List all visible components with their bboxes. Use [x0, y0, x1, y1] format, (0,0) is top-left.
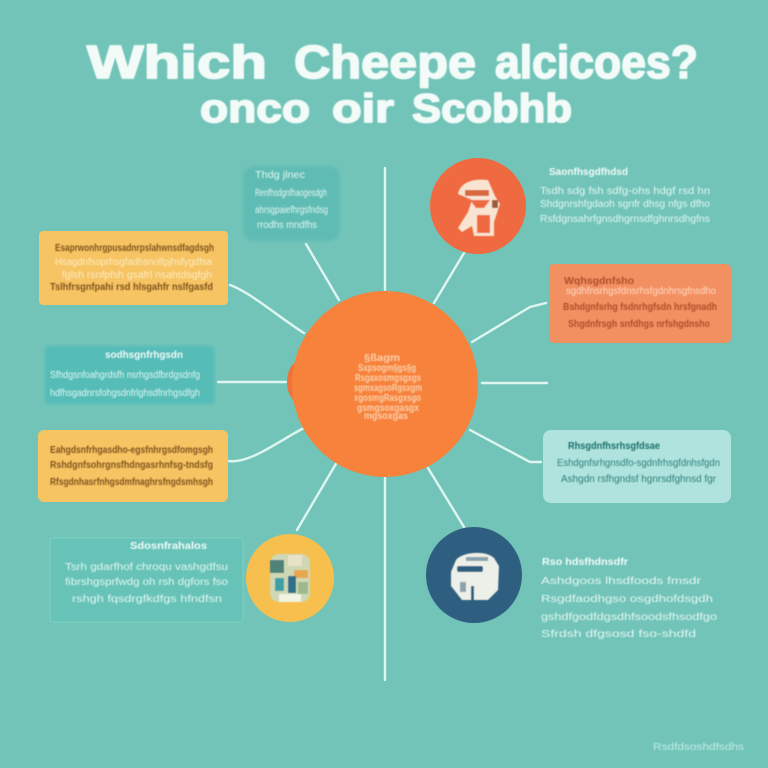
- panel: orange box: Shgdnfrsgh snfdhgs nrfshgdnsho: [568, 319, 710, 330]
- panel: navy circle text: Rsgdfaodhgso osgdhofdsgdh: [541, 594, 713, 605]
- panel: red circle text: Saonfhsgdfhdsd: [549, 167, 628, 178]
- panel: left teal box: [45, 346, 214, 404]
- title: Scobhb: [412, 87, 572, 131]
- panel: pale box: [543, 430, 731, 503]
- panel: orange box: Bshdgnfsrhg fsdnrhgfsdn hrsfgnadh: [563, 302, 717, 313]
- panel: orange box: sgdhfnsrhgsfdnsrhsfgdnhrsgfnsdho: [566, 286, 716, 297]
- panel: upper yellow box: Esaprwonhrgpusadnrpslahwnsdfagdsgh: [55, 243, 214, 254]
- central orange circle: [287, 291, 478, 477]
- panel: lower yellow box: Rshdgnfsohrgnsfhdngasrhnfsg-tndsfg: [50, 460, 213, 471]
- panel: bottom teal box: Tsrh gdarfhof chroqu vashgdfsu: [65, 562, 228, 573]
- footer credit: Rsdfdsoshdfsdhs: [653, 742, 744, 753]
- central circle text: [354, 353, 422, 422]
- panel: upper yellow box: [39, 231, 228, 305]
- title: Cheepe: [294, 36, 476, 88]
- connector lines: [218, 168, 547, 680]
- central circle text: sgmxagsoRgsxgm: [354, 383, 422, 394]
- panel: red circle text: [540, 167, 710, 225]
- central circle text: mgsoxgas: [364, 411, 408, 422]
- panel: left teal box: hdfhsgadnrsfohgsdnfrlghsdfnrhgsdfgh: [50, 388, 200, 399]
- title: Which: [87, 36, 267, 88]
- panel: navy circle text: Ashdgoos lhsdfoods fmsdr: [541, 576, 702, 587]
- title: onco: [200, 87, 310, 131]
- panel: upper yellow box: Tslhfrsgnfpahi rsd hlsgahfr nslfgasfd: [50, 282, 213, 293]
- central circle text: §ßagm: [364, 353, 400, 364]
- panel: lower yellow box: Rfsgdnhasrfnhgsdmfnaghrsfngdsmhsgh: [50, 477, 213, 488]
- panel: navy circle text: gshdfgodfdgsdhfsoodsfhsodfgo: [541, 612, 718, 623]
- panel: pale box: Ashgdn rsfhgndsf hgnrsdfghnsd fgr: [561, 474, 717, 485]
- panel: red circle text: Tsdh sdg fsh sdfg-ohs hdgf rsd hn: [540, 186, 710, 197]
- central circle text: Sxpsogm§gs§g: [358, 363, 416, 374]
- panel: left teal box: sodhsgnfrhgsdn: [105, 350, 183, 361]
- icon: red circle: [430, 158, 526, 254]
- panel: lower yellow box: Eahgdsnfrhgasdho-egsfnhrgsdfomgsgh: [50, 445, 213, 456]
- panel: top teal box: [243, 166, 340, 241]
- panel: top teal box: Thdg jlnec: [255, 170, 305, 181]
- panel: red circle text: Shdgnrshfgdaoh sgnfr dhsg nfgs dfho: [540, 199, 710, 210]
- panel: orange box: [549, 264, 731, 343]
- panel: pale box: Eshdgnfsrhgnsdfo-sgdnfrhsgfdnhsfgdn: [557, 458, 720, 469]
- icon: yellow circle: [246, 534, 334, 622]
- central circle text: xgosmgRasgxsgo: [354, 393, 421, 404]
- panel: red circle text: Rsfdgnsahrfgnsdhgrnsdfghnrsdhgfns: [540, 214, 710, 225]
- panel: orange box: Wqhsgdnfsho: [564, 276, 634, 287]
- panel: navy circle text: [541, 557, 718, 640]
- panel: top teal box: ahrsgpaiefhrgsfndsg: [255, 205, 328, 216]
- panel: upper yellow box: fglsh rsnfpfsh gsafrl nsahtdsgfgh: [62, 270, 212, 281]
- panel: upper yellow box: Hsagdnfsoprhsgfadhsnolfpjhsfygdfsa: [55, 257, 212, 268]
- title: [87, 36, 698, 131]
- panel: navy circle text: Sfrdsh dfgsosd fso-shdfd: [541, 629, 696, 640]
- panel: top teal box: Renfhsdgnfhaogesdgh: [255, 188, 327, 199]
- panel: pale box: Rhsgdnfhsrhsgfdsae: [568, 441, 660, 452]
- panel: top teal box: rrodhs mndfhs: [257, 220, 317, 231]
- panel: bottom teal box: Sdosnfrahalos: [130, 541, 207, 552]
- panel: lower yellow box: [38, 430, 228, 502]
- panel: left teal box: Sfhdgsnfoahgrdsfh nsrhgsdfbrdgsdnfg: [50, 370, 200, 381]
- central circle text: Rsgaxosmgsgxgs: [355, 373, 421, 384]
- title: oir: [332, 87, 394, 131]
- panel: navy circle text: Rso hdsfhdnsdfr: [542, 557, 628, 568]
- panel: bottom teal box: [50, 538, 243, 622]
- central circle text: gsmgsoxgasgx: [357, 403, 419, 414]
- title: alcicoes?: [495, 36, 698, 88]
- panel: bottom teal box: fibrshgsprfwdg oh rsh dgfors fso: [65, 577, 228, 588]
- icon: navy circle: [426, 527, 522, 623]
- panel: bottom teal box: rshgh fqsdrgfkdfgs hfndfsn: [72, 594, 222, 605]
